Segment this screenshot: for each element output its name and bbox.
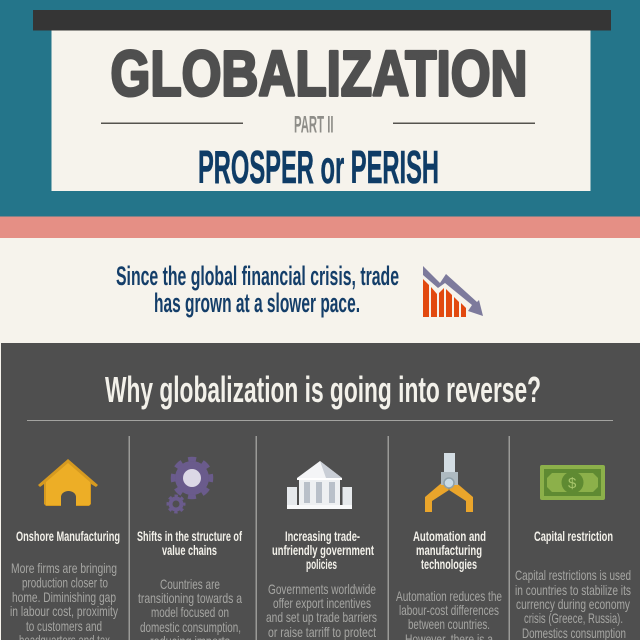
- column: automation: [396, 453, 502, 640]
- text: shifts in value chains: transitioning towards a: [138, 590, 242, 606]
- text: onshore manufacturing: Onshore Manufacturing: [16, 528, 120, 544]
- text: shifts in value chains: Shifts in the structure of: [137, 528, 242, 544]
- intro statement: has grown at a slower pace.: [154, 288, 360, 318]
- text: shifts in value chains: [137, 528, 242, 640]
- text: trade-unfriendly policies: policies: [306, 556, 337, 572]
- panel: why globalization is going into reverse: [1, 343, 640, 640]
- text: capital restriction: [515, 528, 631, 640]
- icon: gears: [168, 459, 211, 512]
- text: automation: Automation reduces the: [396, 588, 502, 604]
- subtitle: part II: PART II: [294, 112, 334, 138]
- text: onshore manufacturing: More firms are bringing: [11, 560, 117, 576]
- icon: house: [38, 459, 98, 506]
- pink stripe: [0, 216, 640, 238]
- icon: robotic claw: [425, 453, 473, 512]
- header band: [0, 0, 640, 216]
- icon: declining bar chart with arrow: [423, 266, 483, 317]
- text: shifts in value chains: Countries are: [160, 576, 220, 592]
- column: trade-unfriendly policies: [266, 461, 377, 640]
- text: trade-unfriendly policies: unfriendly government: [272, 542, 374, 558]
- title: GLOBALIZATION: [110, 38, 528, 110]
- text: trade-unfriendly policies: Increasing trade-: [285, 528, 360, 544]
- text: automation: labour-cost differences: [399, 602, 499, 618]
- column: capital restriction: [515, 465, 631, 640]
- text: shifts in value chains: value chains: [162, 542, 217, 558]
- text: automation: between countries.: [408, 616, 490, 632]
- text: automation: [396, 528, 502, 640]
- intro statement: Since the global financial crisis, trade: [116, 261, 399, 291]
- text: onshore manufacturing: [10, 528, 120, 640]
- text: trade-unfriendly policies: offer export incentives: [273, 595, 371, 611]
- text: shifts in value chains: model focused on: [151, 604, 229, 620]
- text: onshore manufacturing: to customers and: [26, 618, 102, 634]
- text: trade-unfriendly policies: or raise tarriff to protect: [268, 624, 376, 640]
- text: automation: Automation and: [413, 528, 486, 544]
- text: onshore manufacturing: production closer to: [22, 574, 108, 590]
- text: onshore manufacturing: in labour cost, proximity: [10, 603, 118, 619]
- column: onshore manufacturing: [10, 459, 120, 640]
- text: trade-unfriendly policies: and set up trade barriers: [266, 609, 377, 625]
- icon: banknote: $: [568, 475, 577, 492]
- text: automation: manufacturing: [416, 542, 482, 558]
- icon: government building: [287, 461, 352, 509]
- text: automation: technologies: [421, 556, 477, 572]
- icon: banknote: [540, 465, 605, 500]
- text: shifts in value chains: domestic consumption,: [140, 619, 241, 635]
- text: trade-unfriendly policies: Governments worldwide: [268, 581, 376, 597]
- column: shifts in value chains: [137, 459, 242, 640]
- text: trade-unfriendly policies: [266, 528, 377, 640]
- intro statement: [116, 261, 399, 318]
- text: onshore manufacturing: home. Diminishing gap: [12, 589, 116, 605]
